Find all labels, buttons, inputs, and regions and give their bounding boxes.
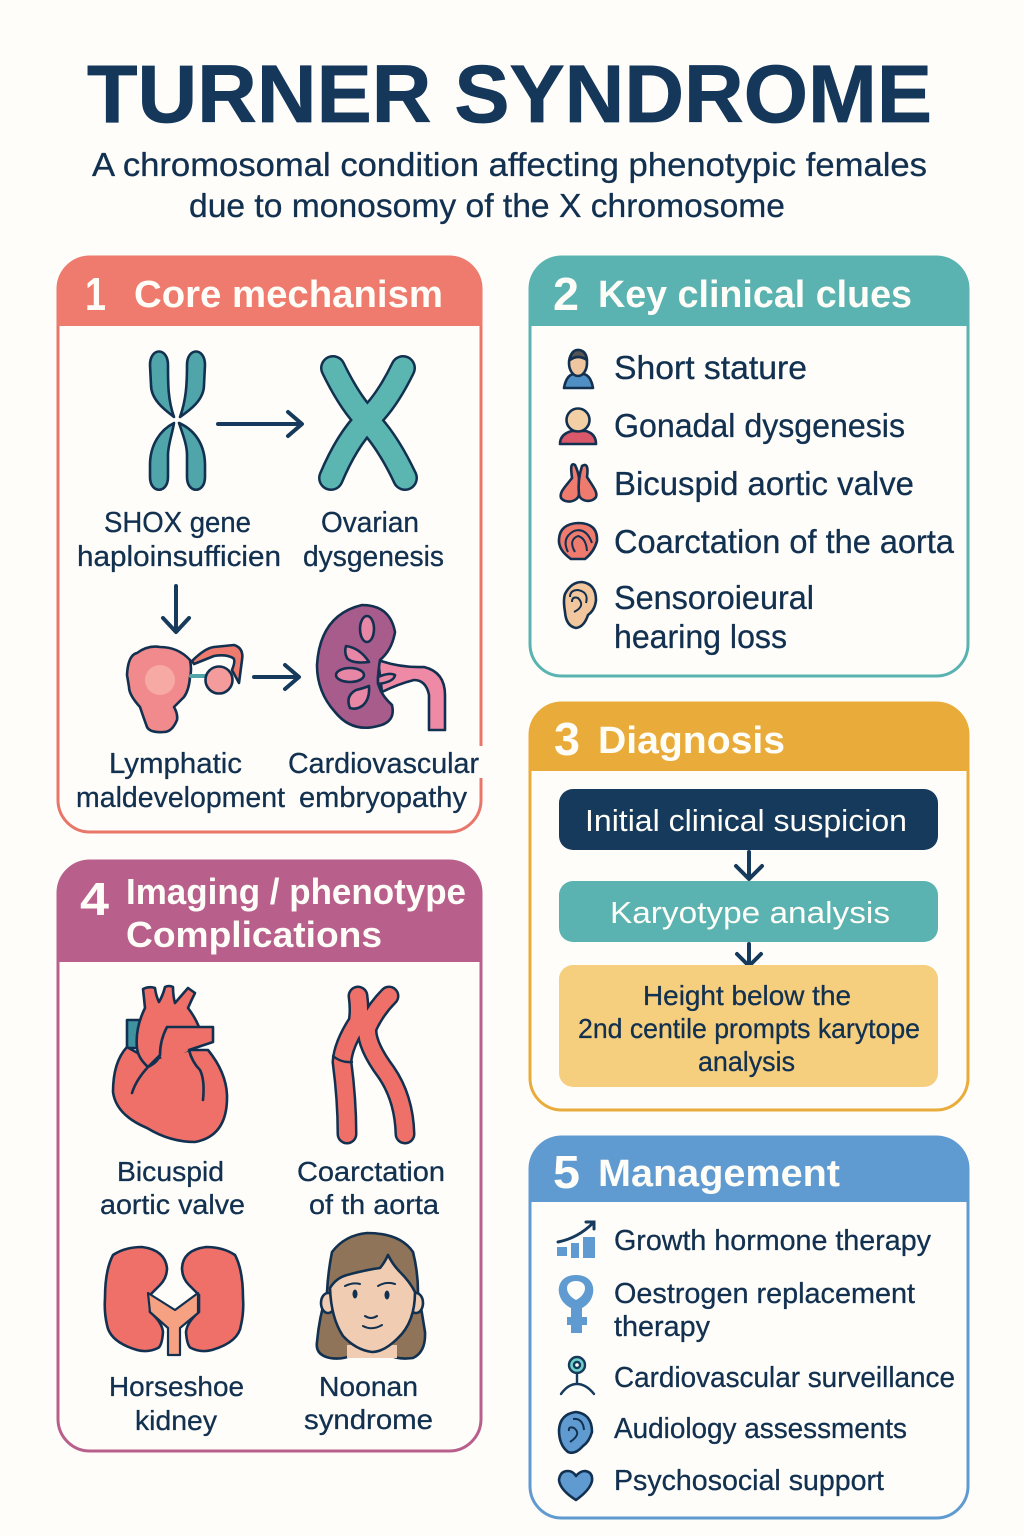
icon: kidney: [317, 605, 445, 730]
heading: management: Management: [598, 1153, 840, 1195]
step: height criterion: [559, 965, 938, 1087]
arrow: uterus to kidney: [254, 665, 299, 689]
icon: short stature person: [564, 350, 593, 388]
icon: ear: [564, 582, 596, 628]
step: initial clinical suspicion: [559, 789, 938, 850]
text: bicuspid aortic valve: Bicuspid aortic valve: [614, 465, 914, 502]
icon: cardiovascular surveillance: [561, 1357, 594, 1394]
heading: diagnosis: Diagnosis: [598, 720, 785, 762]
label: SHOX gene: [77, 507, 281, 573]
text: coarctation of the aorta: Coarctation of the aorta: [614, 523, 955, 560]
step: karyotype analysis: Karyotype analysis: [610, 895, 890, 930]
heading: diagnosis: [554, 713, 785, 765]
label: bicuspid aortic valve: [100, 1156, 245, 1220]
heading: core mechanism: [85, 268, 443, 320]
label: coarctation of the aorta: Coarctation: [297, 1156, 445, 1187]
text: psychosocial support: Psychosocial support: [614, 1465, 884, 1497]
heading: key clinical clues: Key clinical clues: [598, 274, 912, 316]
label: cardiovascular embryopathy: [288, 748, 479, 814]
icon: blue ear: [559, 1412, 592, 1453]
label: SHOX gene: haploinsufficien: [77, 541, 281, 573]
panel: management: [529, 1136, 969, 1518]
step: height criterion: 2nd centile prompts karytope: [578, 1013, 920, 1044]
label: noonan syndrome: syndrome: [304, 1404, 433, 1435]
subtitle: A chromosomal condition affecting phenotypic females: [92, 146, 927, 183]
arrow: down to uterus: [163, 586, 189, 632]
text: sensorineural hearing loss: [614, 579, 814, 655]
label: lymphatic maldevelopment: Lymphatic: [109, 748, 242, 780]
icon: aorta coil: [559, 523, 597, 559]
text: sensorineural hearing loss: hearing loss: [614, 618, 787, 655]
subtitle: due to monosomy of the X chromosome: [189, 187, 785, 224]
text: cardiovascular surveillance: Cardiovascular surveillance: [614, 1362, 955, 1394]
icon: heart: [559, 1471, 592, 1500]
label: bicuspid aortic valve: Bicuspid: [117, 1156, 224, 1187]
text: audiology assessments: Audiology assessments: [614, 1413, 907, 1445]
label: ovarian dysgenesis: [303, 507, 444, 573]
icon: uterus and ovary: [127, 645, 242, 732]
icon: broken chromosome: [150, 352, 205, 490]
text: gonadal dysgenesis: Gonadal dysgenesis: [614, 407, 905, 444]
heading: imaging and complications: Imaging / phenotype: [126, 871, 466, 912]
step: initial clinical suspicion: Initial clinical suspicion: [585, 803, 907, 838]
icon: horseshoe kidney: [105, 1247, 243, 1355]
text: oestrogen replacement therapy: Oestrogen replacement: [614, 1278, 915, 1310]
arrow: chromosome to X: [218, 412, 302, 436]
step: karyotype analysis: [559, 881, 938, 942]
label: cardiovascular embryopathy: embryopathy: [299, 782, 467, 814]
panel: diagnosis: [529, 702, 969, 1110]
text: growth hormone therapy: Growth hormone therapy: [614, 1225, 931, 1257]
label: ovarian dysgenesis: dysgenesis: [303, 541, 444, 573]
label: cardiovascular embryopathy: Cardiovascular: [288, 748, 479, 780]
heading: core mechanism: Core mechanism: [134, 274, 443, 316]
label: coarctation of the aorta: of th aorta: [309, 1189, 439, 1220]
text: sensorineural hearing loss: Sensoroieural: [614, 579, 814, 616]
text: oestrogen replacement therapy: therapy: [614, 1311, 710, 1343]
icon: growth chart: [557, 1222, 595, 1258]
label: noonan syndrome: Noonan: [319, 1371, 418, 1402]
step: height criterion: Height below the: [643, 980, 851, 1011]
panel: core mechanism: [57, 256, 486, 832]
heading: key clinical clues: 2: [553, 268, 579, 320]
icon: coarctation vessel: [333, 996, 405, 1134]
label: bicuspid aortic valve: aortic valve: [100, 1189, 245, 1220]
heading: management: 5: [553, 1146, 580, 1198]
text: oestrogen replacement therapy: [614, 1278, 915, 1343]
label: ovarian dysgenesis: Ovarian: [321, 507, 419, 539]
label: coarctation of the aorta: [297, 1156, 445, 1220]
heading: imaging and complications: [80, 871, 466, 955]
label: horseshoe kidney: Horseshoe: [109, 1371, 244, 1402]
icon: bicuspid valve: [561, 464, 596, 502]
label: SHOX gene: SHOX gene: [104, 507, 251, 539]
icon: face with hair: [317, 1233, 425, 1359]
text: short stature: Short stature: [614, 349, 807, 386]
icon: heart: [113, 986, 227, 1142]
label: lymphatic maldevelopment: [76, 748, 285, 814]
arrow: to height criterion: [737, 944, 761, 966]
panel: key clinical clues: [529, 256, 969, 676]
label: noonan syndrome: [304, 1371, 433, 1435]
heading: core mechanism: 1: [85, 268, 106, 320]
panel: imaging and complications: [57, 860, 482, 1451]
heading: management: [553, 1146, 840, 1198]
label: lymphatic maldevelopment: maldevelopment: [76, 782, 285, 814]
heading: diagnosis: 3: [554, 713, 580, 765]
heading: imaging and complications: 4: [80, 873, 109, 925]
title: TURNER SYNDROME: [87, 49, 932, 140]
icon: gonadal person: [560, 408, 596, 444]
label: horseshoe kidney: [109, 1371, 244, 1436]
arrow: to karyotype: [736, 852, 762, 879]
label: horseshoe kidney: kidney: [135, 1405, 217, 1436]
icon: X chromosome: [331, 368, 405, 478]
step: height criterion: analysis: [698, 1046, 795, 1077]
heading: imaging and complications: Complications: [126, 914, 382, 955]
subtitle: [92, 146, 927, 224]
icon: female symbol: [559, 1275, 593, 1333]
